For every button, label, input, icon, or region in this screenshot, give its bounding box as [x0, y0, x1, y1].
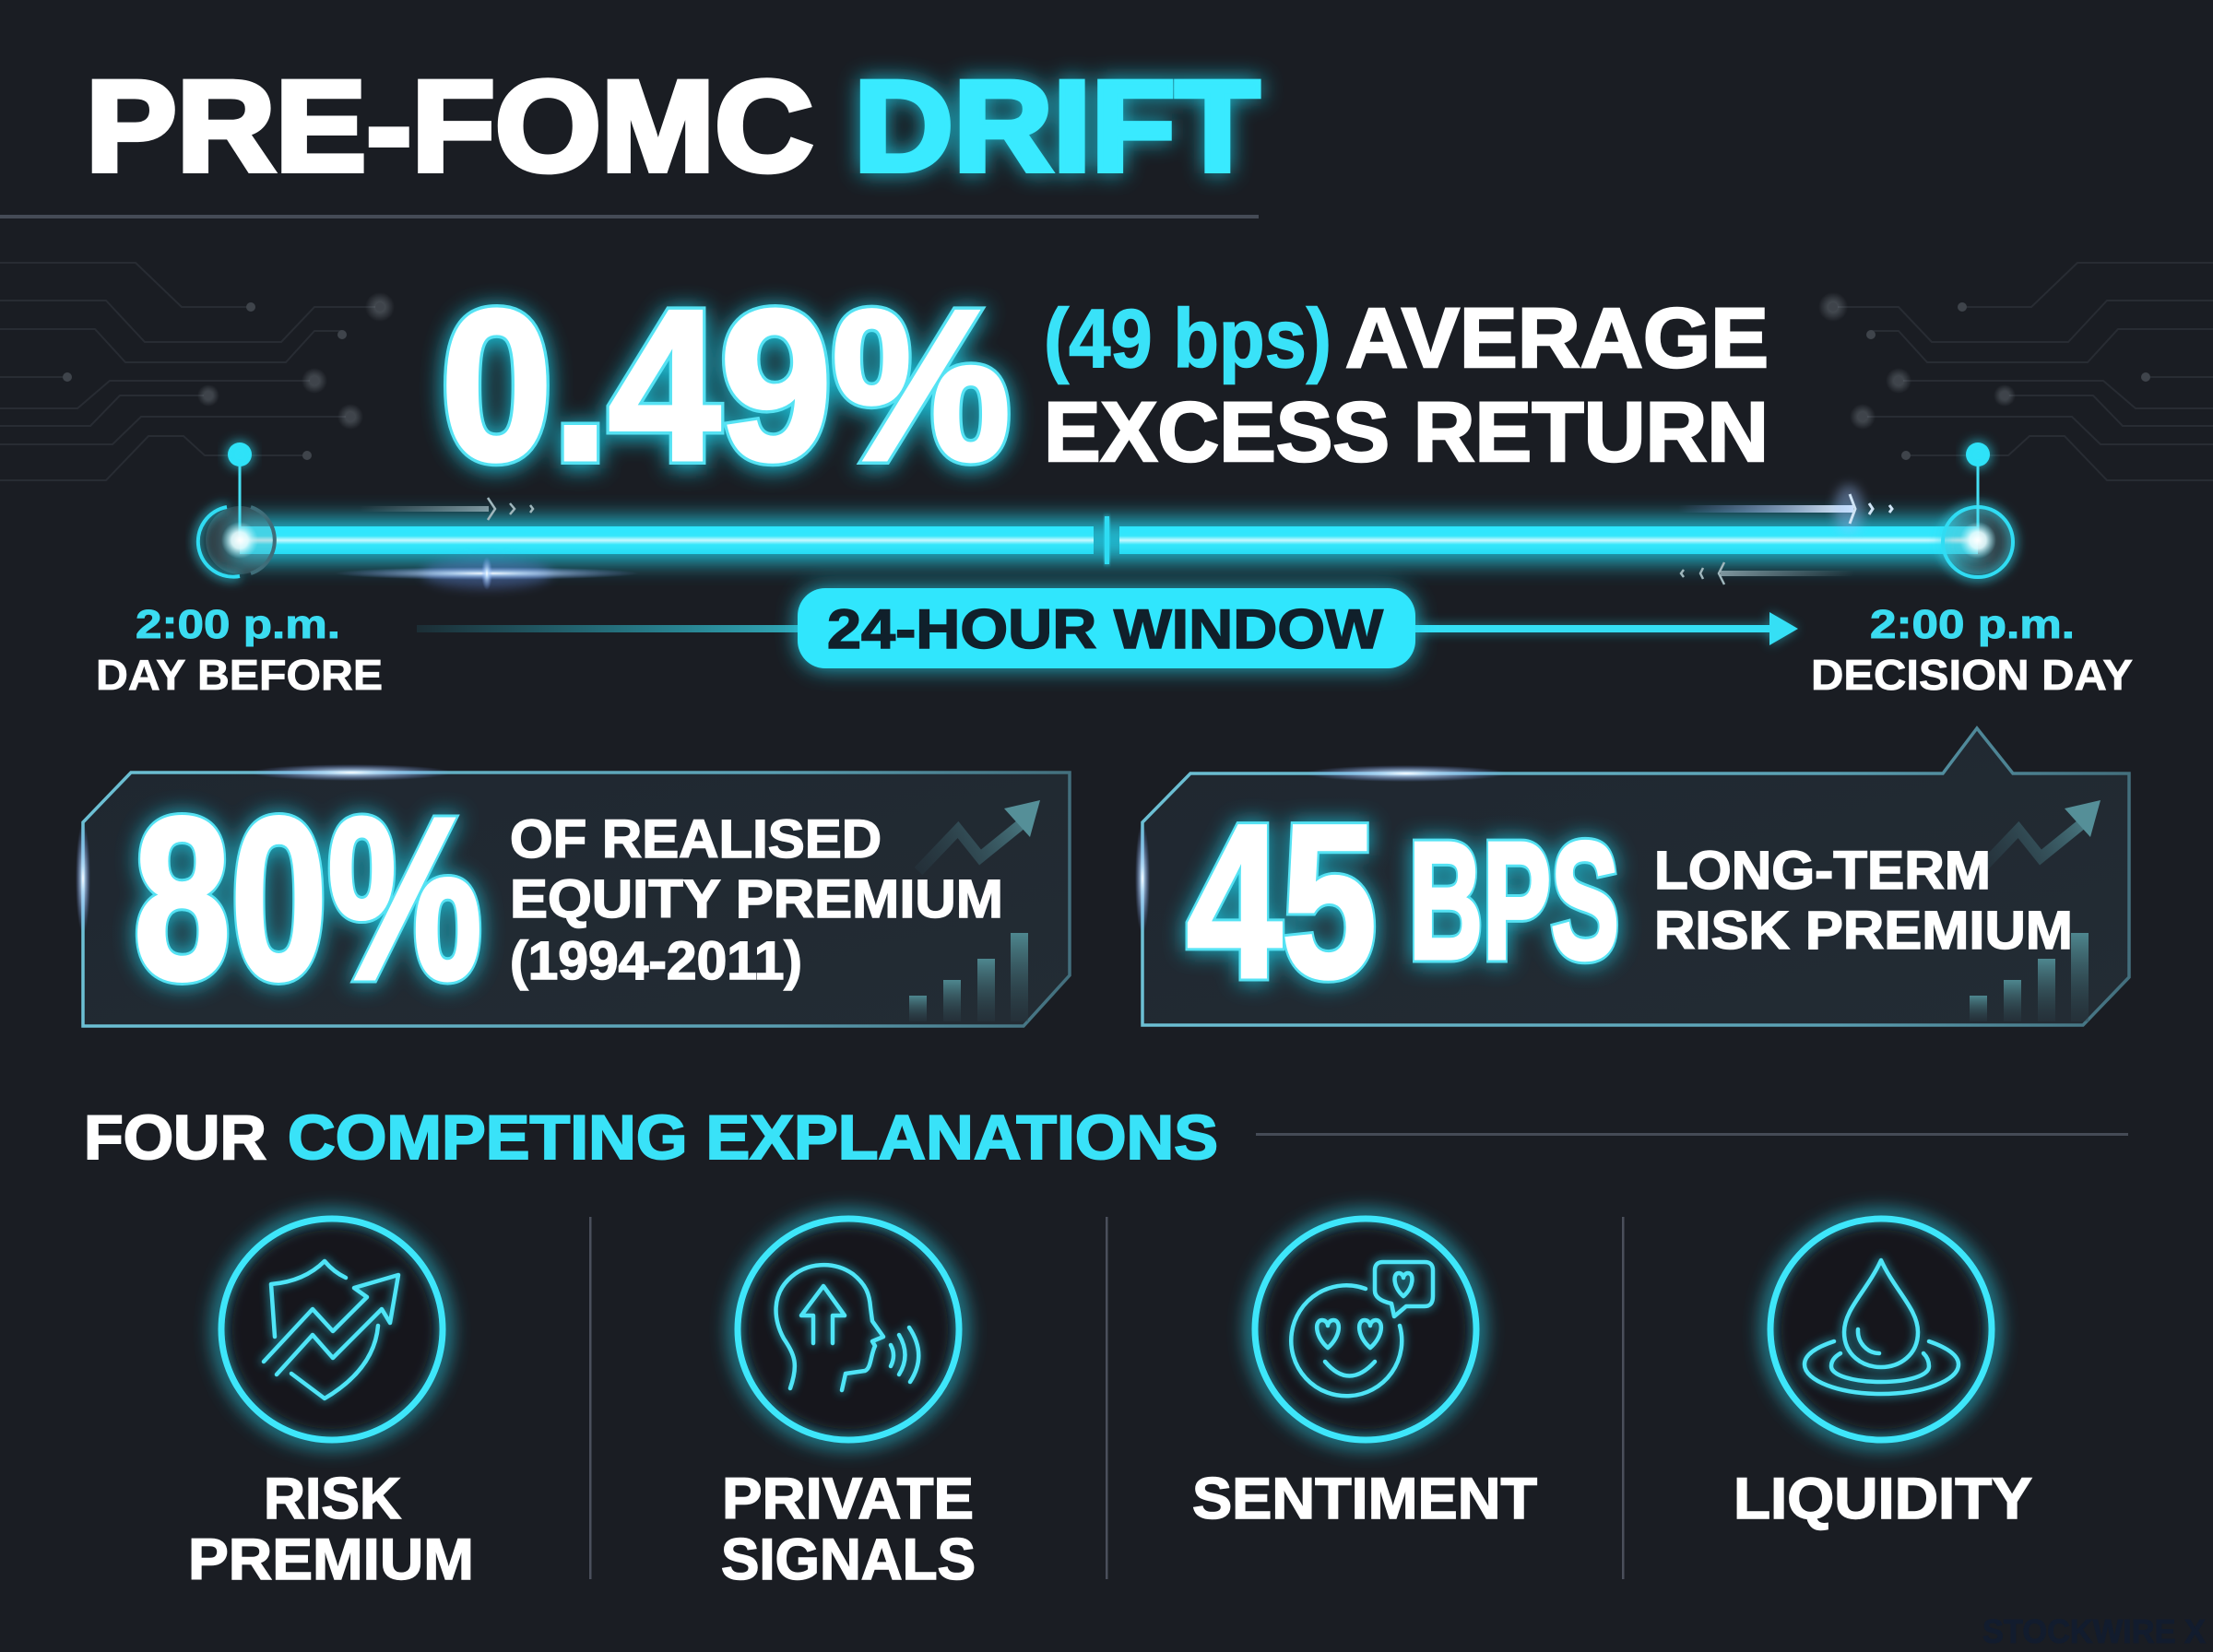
45 BPS description: LONG-TERM — [1654, 841, 1991, 901]
24-hour window pill — [798, 588, 1415, 668]
section heading: COMPETING EXPLANATIONS — [288, 1103, 1218, 1173]
sparkle left — [335, 557, 639, 590]
label: private signals: PRIVATE — [722, 1467, 974, 1531]
panel: 80% stat — [76, 764, 1070, 1028]
right time label: 2:00 p.m. — [1870, 602, 2075, 647]
column: private signals — [721, 1219, 976, 1592]
column dividers — [589, 1217, 1625, 1579]
title — [86, 53, 1260, 198]
headline description: (49 bps) — [1044, 293, 1331, 385]
left time label — [96, 602, 383, 699]
title: DRIFT — [854, 53, 1260, 198]
icon: smiling face with hearts — [1255, 1219, 1476, 1440]
small arrow top right — [1678, 485, 1892, 533]
small arrow bottom right — [1681, 562, 1854, 584]
right time label — [1811, 602, 2133, 699]
45 BPS value: BPS — [1409, 808, 1619, 994]
right time label: DECISION DAY — [1811, 651, 2133, 699]
icon: shield with trend arrow — [221, 1219, 443, 1440]
80% value: 80% — [134, 770, 482, 1027]
title: PRE-FOMC — [86, 53, 813, 198]
left time label: DAY BEFORE — [96, 651, 383, 699]
section rule — [1256, 1133, 2128, 1136]
decorative trend arrow — [918, 800, 1040, 871]
45 BPS description: RISK PREMIUM — [1654, 901, 2073, 961]
small arrow top left — [360, 498, 533, 520]
label: liquidity: LIQUIDITY — [1734, 1467, 2032, 1531]
right time node — [1943, 441, 2013, 577]
decorative bars — [909, 933, 1028, 1021]
icon: water drop with ripples — [1770, 1219, 1992, 1440]
headline description: EXCESS RETURN — [1044, 385, 1769, 479]
headline stat 0.49%: 0.49% — [441, 269, 1011, 508]
headline stat 0.49%: 0.49% — [441, 266, 1011, 505]
decorative bars — [1970, 933, 2089, 1021]
label: risk premium — [188, 1467, 474, 1592]
timeline bar — [231, 516, 1982, 564]
80% value: 80% — [134, 771, 482, 1028]
decorative trend arrow — [1979, 800, 2101, 871]
column: liquidity — [1734, 1219, 2032, 1531]
watermark: STOCKWIRE X — [1982, 1612, 2206, 1650]
45 BPS value: BPS — [1409, 809, 1619, 995]
left time label: 2:00 p.m. — [136, 602, 340, 647]
midpoint tick — [1105, 516, 1109, 564]
45 BPS value: BPS — [1409, 808, 1619, 994]
label: private signals — [721, 1467, 976, 1592]
80% description: EQUITY PREMIUM — [510, 869, 1003, 929]
45 BPS value: 45 — [1187, 781, 1377, 1024]
headline stat 0.49%: 0.49% — [441, 266, 1011, 505]
45 BPS value — [1187, 780, 1619, 1024]
24-hour window pill: 24-HOUR WINDOW — [827, 598, 1383, 660]
window arrow right — [1414, 612, 1798, 645]
column: sentiment — [1192, 1219, 1537, 1531]
headline description — [1044, 291, 1769, 479]
label: risk premium: PREMIUM — [188, 1528, 474, 1592]
label: private signals: SIGNALS — [721, 1528, 976, 1592]
left time node — [198, 441, 275, 577]
80% description: OF REALISED — [510, 809, 882, 869]
circuit lines left — [0, 263, 395, 480]
headline description: AVERAGE — [1345, 291, 1769, 385]
title: DRIFT — [854, 53, 1260, 198]
80% description: (1994-2011) — [510, 931, 802, 991]
45 BPS value: 45 — [1187, 780, 1377, 1023]
section heading: FOUR — [84, 1103, 266, 1173]
icon: head with speech waves — [738, 1219, 959, 1440]
panel: 45 BPS stat — [1135, 728, 2129, 1025]
80% description — [510, 809, 1003, 991]
80% value: 80% — [134, 770, 482, 1027]
column: risk premium — [188, 1219, 474, 1592]
title rule — [0, 215, 1259, 218]
label: risk premium: RISK — [264, 1467, 401, 1531]
circuit lines right — [1818, 263, 2213, 480]
window connector line left — [417, 625, 799, 632]
label: sentiment: SENTIMENT — [1192, 1467, 1537, 1531]
45 BPS description — [1654, 841, 2073, 961]
45 BPS value: 45 — [1187, 780, 1377, 1023]
